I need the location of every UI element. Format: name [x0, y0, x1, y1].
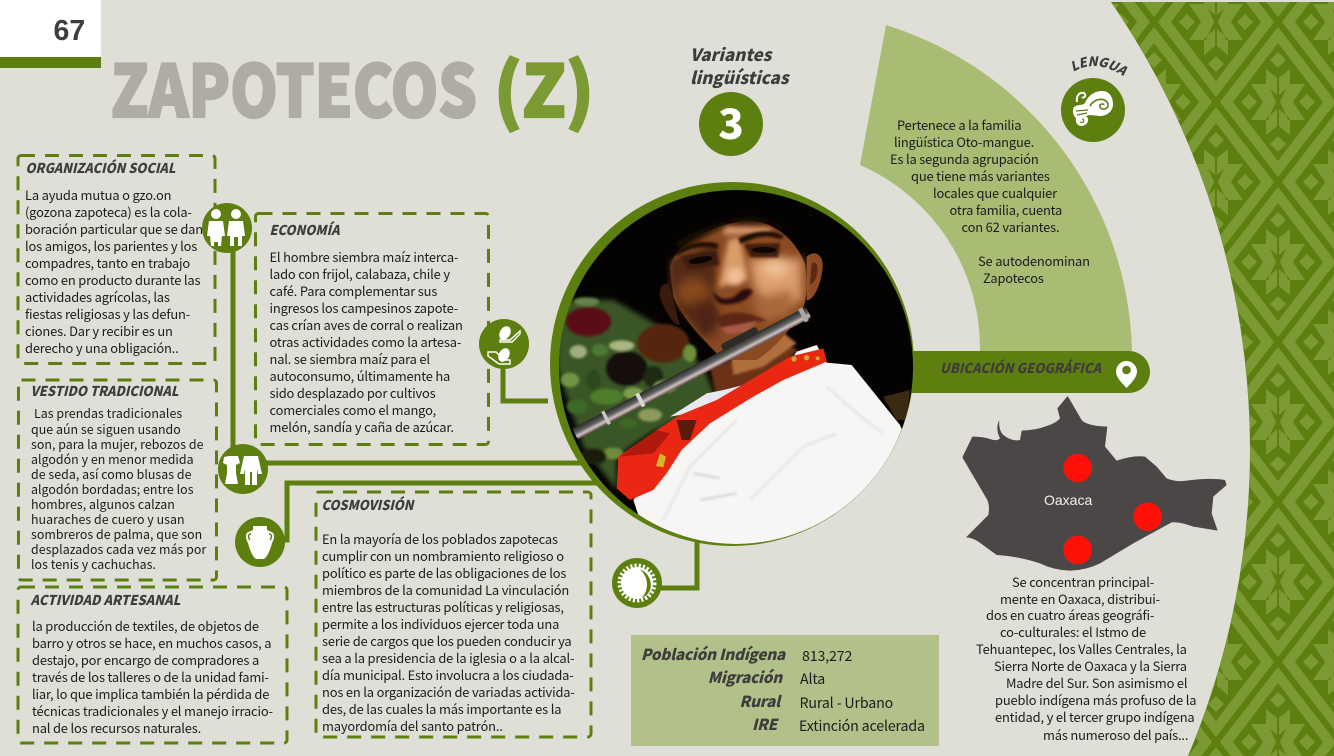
text: cosmovisión: serie de cargos que los pueden conducir ya [322, 631, 572, 650]
shading [670, 243, 720, 337]
icon: clay vase [235, 517, 285, 567]
lengua text: otra familia, cuenta [950, 200, 1062, 219]
text: organización social: actividades agrícolas, las [25, 287, 170, 306]
panel: statistics: Rural [740, 690, 782, 712]
icon: people [202, 203, 252, 253]
page number [0, 0, 101, 68]
text: vestido tradicional: de seda, así como blusas de [31, 465, 192, 483]
icon: sun and moon [612, 558, 662, 608]
text: economía: El hombre siembra maíz interca- [270, 247, 458, 266]
text: organización social: boración particular que se dan [25, 219, 203, 238]
text: vestido tradicional: algodón bordadas; entre los [31, 480, 194, 498]
face close-up [660, 217, 823, 360]
text: cosmovisión: nos en la organización de variadas activida- [322, 682, 575, 701]
panel: economía [256, 214, 488, 444]
heading: economía: ECONOMÍA [270, 219, 340, 239]
lengua text: Es la segunda agrupación [890, 149, 1039, 168]
lengua text: Zapotecos [983, 268, 1044, 287]
text: organización social: ciones. Dar y recibir es un [25, 321, 173, 340]
text: cosmovisión: cumplir con un nombramiento religioso o [322, 546, 564, 565]
text: organización social: derecho y una obligación.. [25, 338, 178, 357]
right-edge detail [883, 390, 910, 420]
text: cosmovisión [322, 529, 575, 735]
text: vestido tradicional: Las prendas tradicionales [34, 404, 182, 422]
map of Oaxaca [962, 396, 1227, 571]
text: economía: café. Para complementar sus [270, 281, 437, 300]
text: vestido tradicional: los tenis y cachuchas. [31, 555, 156, 573]
variantes lingüísticas: Variantes [690, 41, 774, 66]
page number: 67 [54, 15, 85, 47]
text: ubicación: más numeroso del país... [1043, 725, 1188, 744]
panel: actividad artesanal [18, 587, 287, 743]
text: economía: otras actividades como la artesa- [270, 332, 461, 351]
variantes lingüísticas: lingüísticas [690, 64, 791, 89]
title: ZAPOTECOS [111, 33, 477, 138]
map of Oaxaca: Oaxaca [1044, 492, 1092, 508]
heading: organización social: ORGANIZACIÓN SOCIAL [26, 157, 176, 177]
variantes lingüísticas [690, 41, 791, 156]
text: actividad artesanal: través de los talleres o de la unidad fami- [32, 667, 269, 686]
neck [709, 346, 799, 392]
text: actividad artesanal [32, 616, 273, 737]
lengua text: lingüística Oto-mangue. [894, 132, 1034, 151]
icon: hands with grain [479, 319, 529, 369]
text: economía: ingresos los campesinos zapote- [270, 298, 458, 317]
text: ubicación: mente en Oaxaca, distribui- [1000, 589, 1160, 608]
text: cosmovisión: mayordomía del santo patrón.. [322, 716, 503, 735]
text: vestido tradicional [31, 404, 206, 573]
text: vestido tradicional: hombres, algunos calzan [31, 495, 175, 513]
text: cosmovisión: día municipal. Esto involucra a los ciudada- [322, 665, 574, 684]
panel: statistics [631, 635, 939, 746]
heading: vestido tradicional: VESTIDO TRADICIONAL [30, 380, 179, 400]
text: cosmovisión: entre las estructuras políticas y religiosas, [322, 597, 564, 616]
panel: statistics: Migración [708, 666, 783, 688]
text: ubicación: Se concentran principal- [1012, 572, 1154, 591]
panel: vestido tradicional [18, 380, 216, 580]
text: actividad artesanal: destajo, por encargo de compradores a [32, 650, 259, 669]
text: cosmovisión: permite a los individuos ejercer toda una [322, 614, 559, 633]
text: cosmovisión: des, de las cuales la más importante es la [322, 699, 561, 718]
text: economía: cas crían aves de corral o realizan [270, 315, 463, 334]
text: organización social [25, 185, 203, 357]
flute [569, 302, 812, 440]
text: cosmovisión: político es parte de las obligaciones de los [322, 563, 566, 582]
brows [675, 232, 784, 256]
panel: statistics: Alta [800, 669, 825, 689]
text: vestido tradicional: algodón y en menor medida [31, 450, 194, 468]
text: cosmovisión: En la mayoría de los poblados zapotecas [322, 529, 558, 548]
lengua text: que tiene más variantes [911, 166, 1050, 185]
face base [670, 221, 807, 360]
lengua text: con 62 variantes. [962, 217, 1059, 236]
text: economía: melón, sandía y caña de azúcar. [270, 417, 454, 436]
text: organización social: como en producto durante las [25, 270, 200, 289]
shirt [633, 345, 923, 550]
text: ubicación: entidad, y el tercer grupo indígena [995, 707, 1194, 726]
panel: statistics: 813,272 [802, 646, 852, 666]
text: economía: lado con frijol, calabaza, chile y [270, 264, 450, 283]
icon: location pin [1116, 361, 1137, 388]
icon: traditional clothes [218, 444, 268, 494]
text: vestido tradicional: sombreros de palma, que son [31, 525, 202, 543]
text: vestido tradicional: que aún se siguen usando [31, 420, 181, 438]
ubicación geográfica bar: UBICACIÓN GEOGRÁFICA [940, 357, 1102, 377]
text: organización social: los amigos, los parientes y los [25, 236, 197, 255]
text: ubicación: pueblo indígena más profuso de la [995, 690, 1196, 709]
icon: lengua speech swirl [1061, 78, 1125, 142]
text: actividad artesanal: la producción de textiles, de objetos de [32, 616, 259, 635]
eye sockets and eyes [681, 243, 780, 269]
text: organización social: compadres, tanto en trabajo [25, 253, 190, 272]
panel: cosmovisión [316, 492, 591, 737]
text: ubicación [976, 572, 1196, 744]
text: actividad artesanal: liar, lo que implica también la pérdida de [32, 684, 269, 703]
nose [713, 289, 753, 304]
text: ubicación: dos en cuatro áreas geográfi- [986, 605, 1154, 624]
text: organización social: La ayuda mutua o gzo.on [25, 185, 171, 204]
heading: actividad artesanal: ACTIVIDAD ARTESANAL [30, 589, 181, 609]
lengua text: locales que cualquier [933, 183, 1058, 202]
text: economía: nal. se siembra maíz para el [270, 349, 430, 368]
connectors [233, 250, 697, 588]
lengua heading [1072, 56, 1128, 76]
text: actividad artesanal: barro y otros se hace, en muchos casos, a [32, 633, 271, 652]
text: economía [270, 247, 463, 436]
lengua heading: LENGUA [1072, 56, 1128, 76]
text: cosmovisión: sea a la presidencia de la iglesia o a la alcal- [322, 648, 574, 667]
heading: cosmovisión: COSMOVISIÓN [322, 494, 415, 514]
lengua text [890, 115, 1090, 287]
panel: lengua fan [860, 25, 1132, 351]
text: cosmovisión: miembros de la comunidad La vinculación [322, 580, 569, 599]
lengua text: Pertenece a la familia [897, 115, 1021, 134]
text: vestido tradicional: desplazados cada vez más por [31, 540, 206, 558]
photo: flute player [550, 180, 923, 550]
text: economía: comerciales como el mango, [270, 400, 436, 419]
lengua text: Se autodenominan [978, 251, 1090, 270]
text: organización social: fiestas religiosas y las defun- [25, 304, 190, 323]
text: vestido tradicional: son, para la mujer, rebozos de [31, 435, 204, 453]
text: actividad artesanal: técnicas tradicionales y el manejo irracio- [32, 701, 273, 720]
text: ubicación: Tehuantepec, los Valles Centrales, la [976, 639, 1187, 658]
text: actividad artesanal: nal de los recursos naturales. [32, 718, 201, 737]
panel: statistics: Extinción acelerada [799, 716, 925, 736]
panel: statistics: Rural - Urbano [800, 693, 893, 713]
variantes lingüísticas: 3 [718, 91, 744, 152]
red scarf [617, 348, 827, 500]
text: economía: autoconsumo, últimamente ha [270, 366, 450, 385]
panel: statistics: Población Indígena [641, 643, 787, 665]
text: economía: sido desplazado por cultivos [270, 383, 436, 402]
text: vestido tradicional: huaraches de cuero y usan [31, 510, 185, 528]
map markers [1063, 454, 1162, 564]
panel: statistics: IRE [752, 713, 780, 735]
title: (Z) [494, 33, 594, 138]
mouth [717, 313, 767, 327]
text: ubicación: Sierra Norte de Oaxaca y la Sierra [994, 656, 1187, 675]
textile pattern band [1111, 2, 1334, 756]
text: ubicación: Madre del Sur. Son asimismo el [1006, 673, 1188, 692]
panel: organización social [18, 156, 215, 364]
foliage [557, 300, 717, 490]
ears [807, 253, 823, 300]
ubicación geográfica bar [900, 351, 1150, 393]
text: ubicación: co-culturales: el Istmo de [1000, 622, 1146, 641]
text: organización social: (gozona zapoteca) es la cola- [25, 202, 192, 221]
